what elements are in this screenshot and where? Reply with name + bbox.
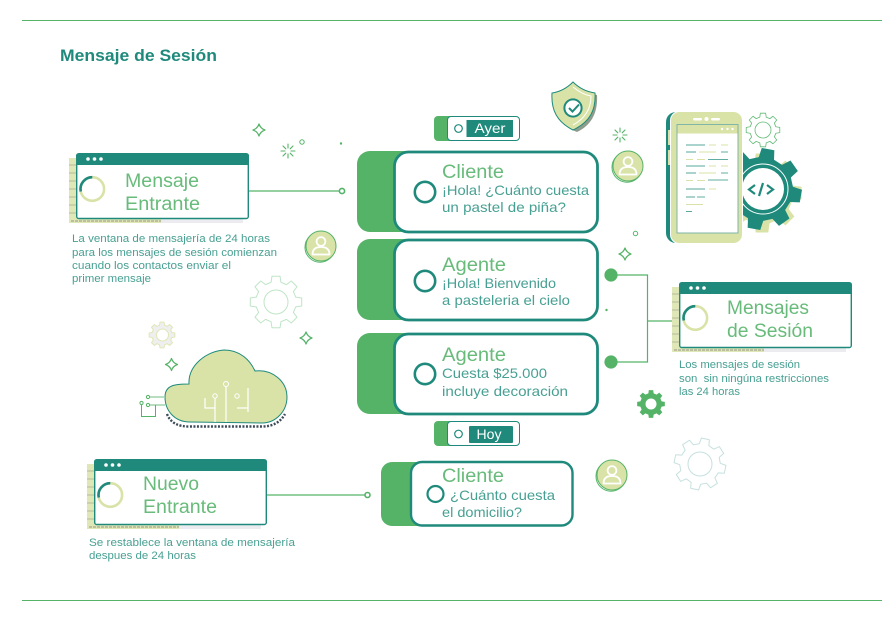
icon: large outline gear [250, 276, 302, 328]
text: mensajes de sesion description: Los mensajes de sesión [679, 359, 800, 371]
text: mensaje entrante description: La ventana de mensajería de 24 horas [72, 233, 271, 245]
chat bubble: cliente domicilio: ¿Cuánto cuesta [450, 487, 555, 503]
bottom divider [22, 600, 882, 601]
chat bubble: agente bienvenida: Agente [442, 255, 506, 276]
panel: mensajes de sesion window [672, 282, 852, 352]
heading: mensaje entrante: Mensaje [125, 171, 199, 192]
chat bubble: cliente domicilio: el domicilio? [442, 504, 522, 520]
chat bubble: cliente: Cliente [442, 162, 504, 183]
chat bubble: agente bienvenida: ¡Hola! Bienvenido [442, 275, 556, 291]
text: mensaje entrante description: primer mensaje [72, 273, 151, 285]
icon: shield [552, 82, 597, 132]
icon: small pale gear [149, 322, 175, 348]
chat bubble: cliente: un pastel de piña? [442, 199, 566, 215]
date tag: hoy: Hoy [476, 426, 502, 442]
panel: nuevo entrante window: Entrante [143, 497, 217, 518]
text: nuevo entrante description: Se restablece la ventana de mensajería [89, 537, 295, 549]
icon: outline gear small [746, 113, 780, 147]
chat bubble: agente precio: incluye decoración [442, 383, 568, 399]
text: mensajes de sesion description [679, 359, 830, 398]
chat bubble: agente precio: Agente [442, 345, 506, 366]
chat bubble: cliente domicilio [381, 462, 572, 526]
chat bubble: agente precio [357, 333, 598, 414]
text: nuevo entrante description [89, 537, 295, 562]
text: mensajes de sesion description: son sin ningúna restricciones [679, 373, 830, 385]
icon: person bottom right [596, 460, 627, 491]
panel: mensajes de sesion window: de Sesión [727, 321, 813, 342]
date tag: hoy [434, 421, 520, 446]
connector: entrante to cliente [249, 188, 345, 194]
connector: agente to mensajes de sesion [604, 268, 674, 369]
decorative sparks [166, 124, 638, 370]
text: nuevo entrante description: despues de 24 horas [89, 550, 197, 562]
text: mensajes de sesion description: las 24 horas [679, 386, 741, 398]
icon: code brackets [749, 183, 773, 196]
connector: nuevo entrante to cliente [267, 492, 370, 498]
icon: person left [305, 231, 336, 262]
chat bubble: agente bienvenida: a pasteleria el cielo [442, 292, 570, 308]
icon: person top right [612, 151, 643, 182]
icon: teal gear with code [714, 142, 808, 236]
chat bubble: cliente domicilio: Cliente [442, 466, 504, 487]
chat bubble: cliente [357, 151, 598, 232]
title: Mensaje de Sesión [60, 46, 217, 65]
text: mensaje entrante description [72, 233, 277, 285]
date tag: ayer [434, 116, 520, 141]
panel: mensaje entrante window [69, 153, 249, 223]
top divider [22, 20, 882, 21]
icon: solid green gear [637, 390, 665, 418]
panel: mensajes de sesion window: Mensajes [727, 298, 809, 319]
text: mensaje entrante description: para los mensajes de sesión comienzan [72, 247, 277, 259]
icon: phone [666, 112, 742, 244]
panel: mensaje entrante window: Entrante [125, 194, 200, 215]
icon: outline gear bottom right [670, 434, 730, 494]
chat bubble: agente precio: Cuesta $25.000 [442, 365, 547, 381]
date tag: ayer: Ayer [474, 120, 506, 136]
chat bubble: cliente: ¡Hola! ¿Cuánto cuesta [442, 182, 589, 198]
icon: cloud [140, 350, 287, 427]
chat bubble: agente bienvenida [357, 239, 598, 320]
text: mensaje entrante description: cuando los contactos enviar el [72, 260, 231, 272]
panel: nuevo entrante window: Nuevo [143, 474, 199, 495]
panel: nuevo entrante window [87, 459, 267, 529]
